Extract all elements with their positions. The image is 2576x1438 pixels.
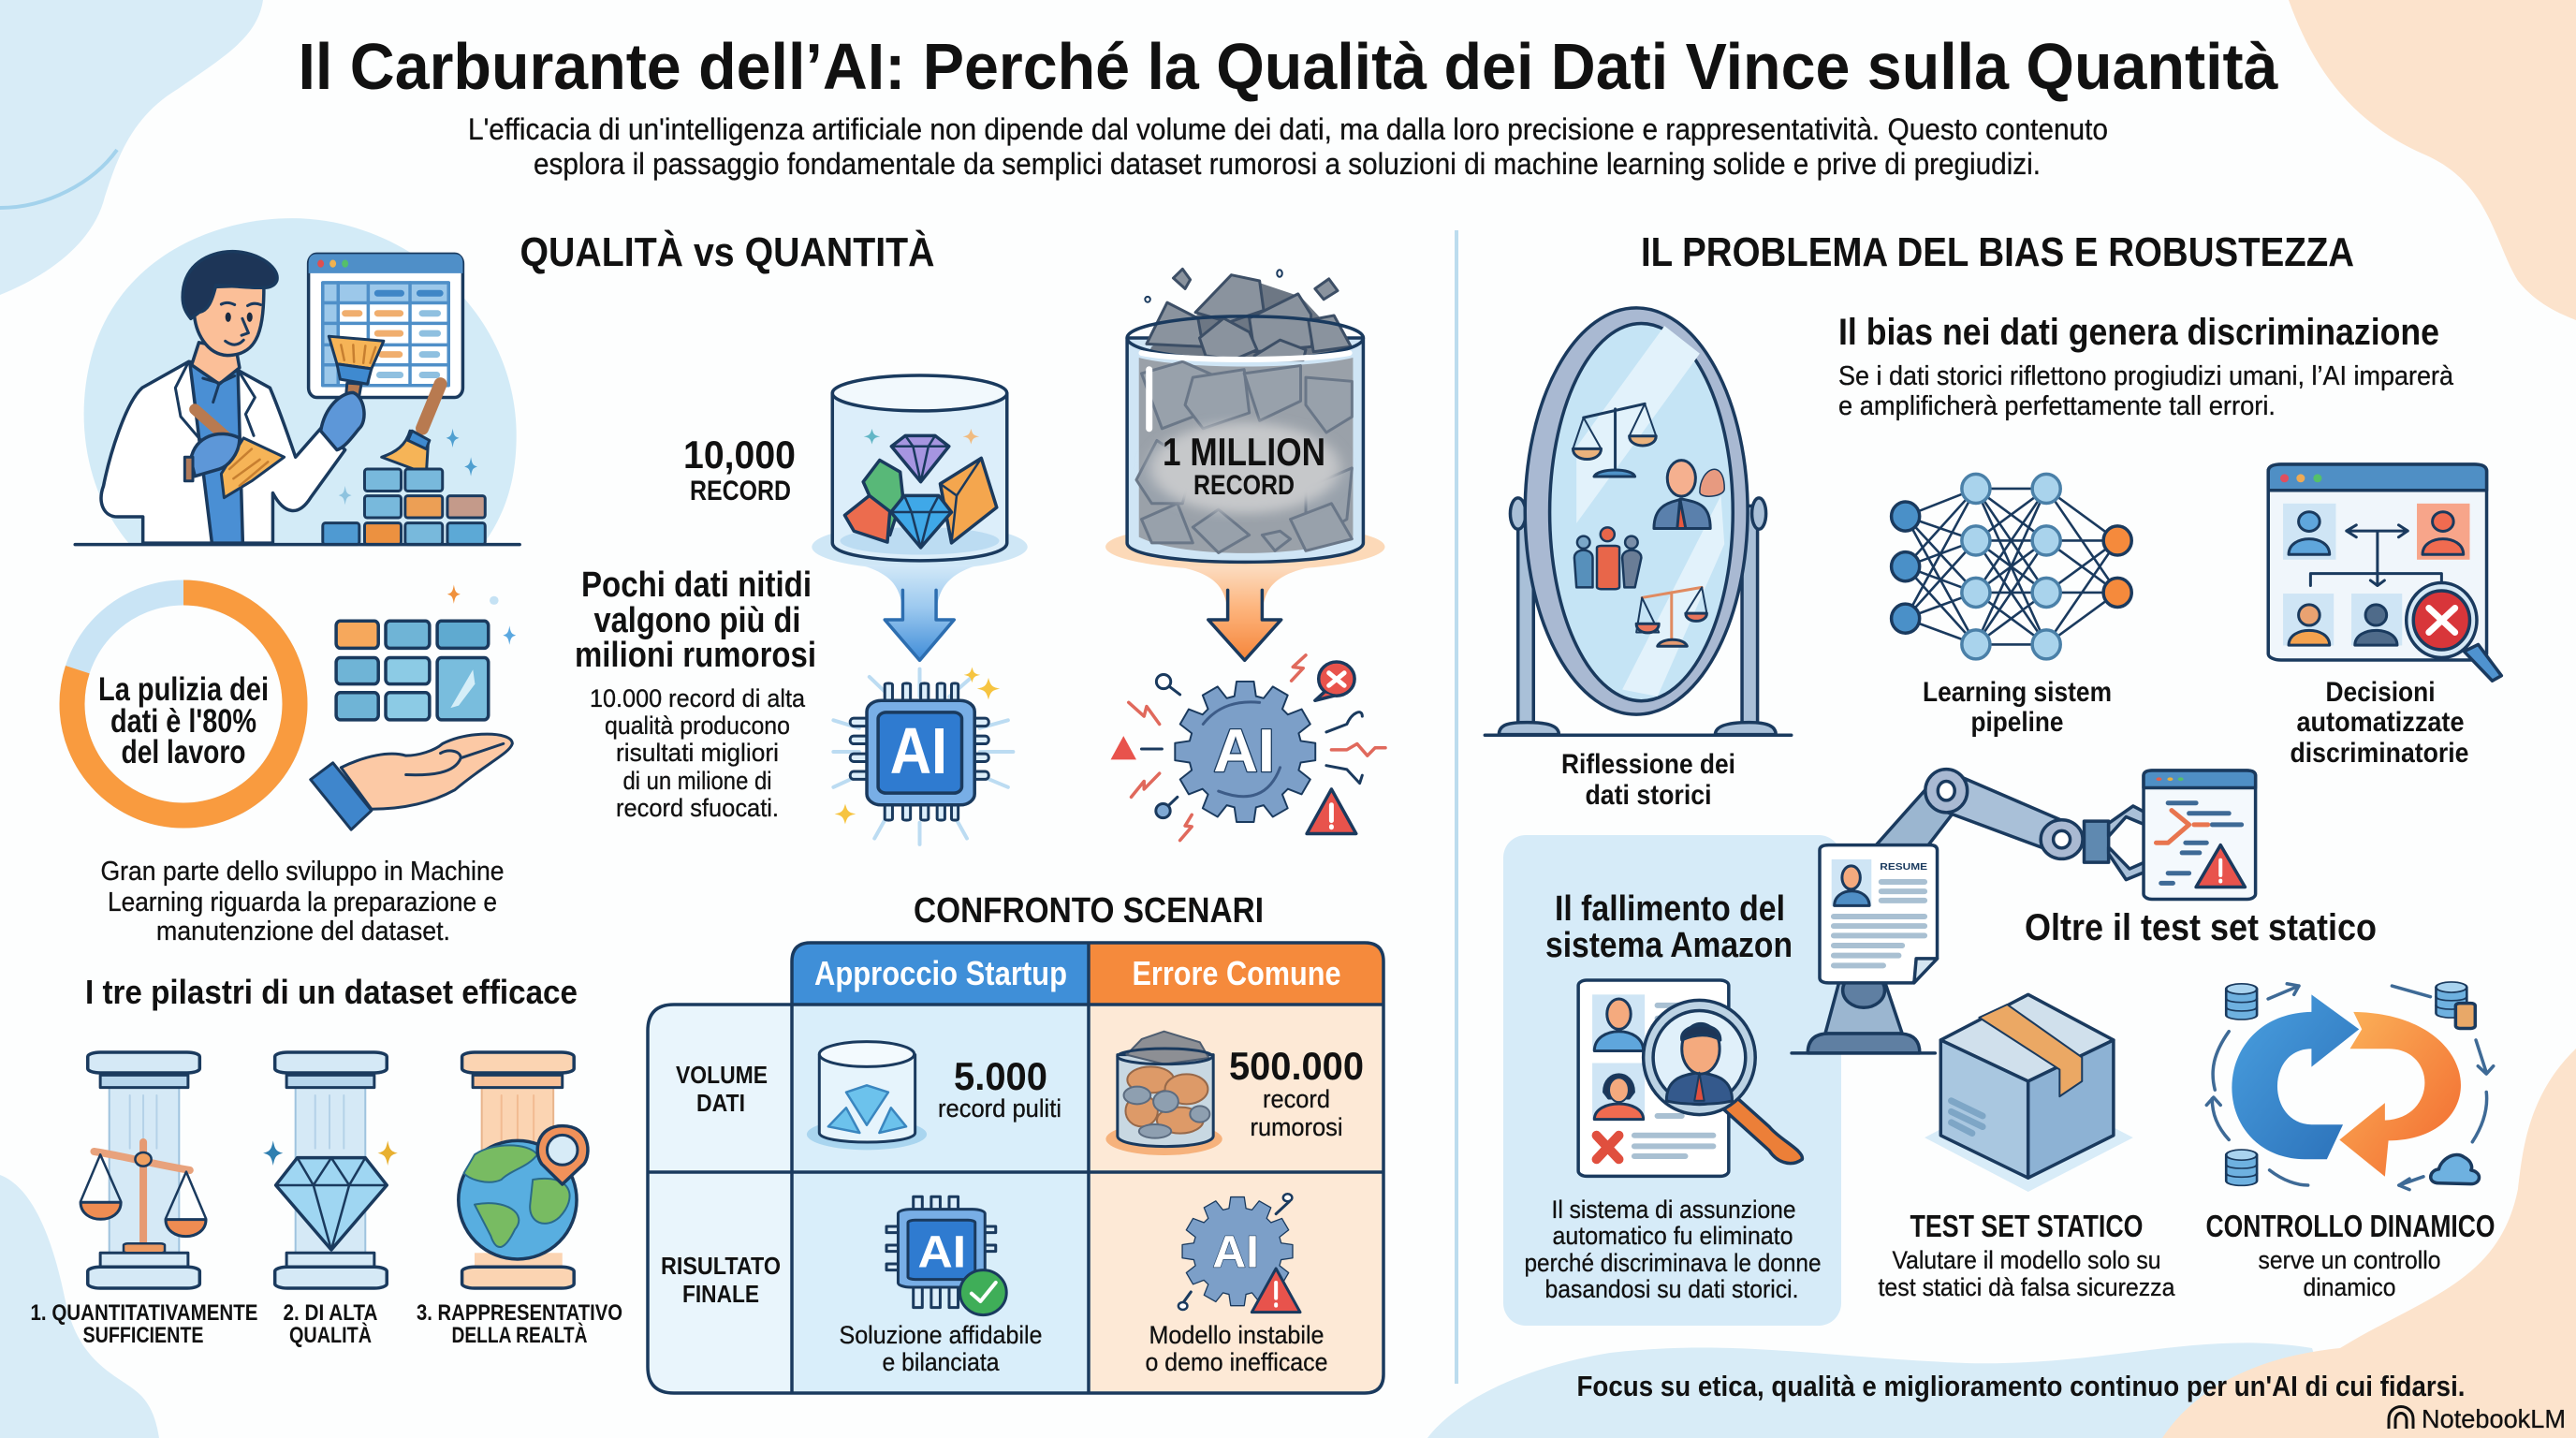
cell: 5.000 clean records: record puliti [938, 1094, 1061, 1123]
donut label [98, 671, 269, 770]
background blob: bottom band blue [1427, 1343, 2340, 1438]
text: static test set [1878, 1209, 2175, 1301]
text: static test set: TEST SET STATICO [1910, 1209, 2144, 1243]
label: automated decisions: Decisioni [2325, 677, 2436, 708]
heading: few clean data: valgono più di [593, 601, 801, 640]
text: amazon body: perché discriminava le donne [1524, 1249, 1822, 1277]
label: neural network: pipeline [1971, 707, 2063, 738]
text: few clean data body: di un milione di [623, 767, 771, 795]
table header: common error [1089, 943, 1383, 1005]
icon: small brush [382, 384, 441, 474]
pillar labels: QUALITÀ [289, 1322, 372, 1348]
icon: data grid held by hand [311, 584, 516, 829]
cell: 500.000 noisy records [1229, 1044, 1364, 1141]
background blob: top right orange [2289, 0, 2576, 320]
label: 10,000 record: 10,000 [683, 433, 796, 477]
icon: data bricks [323, 469, 485, 545]
arrow: noisy data [1178, 566, 1313, 660]
table header: startup [792, 943, 1089, 1005]
icon: scale orange [1636, 587, 1706, 646]
icon: static test box [1925, 994, 2133, 1192]
icon: noisy jar [1105, 1032, 1222, 1155]
heading: few clean data [575, 565, 816, 675]
table icons [807, 1032, 1300, 1315]
pillar labels: 3. RAPPRESENTATIVO [417, 1300, 622, 1326]
panel: three pillars [80, 1052, 588, 1288]
icon: clean cylinder [807, 1042, 927, 1150]
text: amazon body [1524, 1196, 1822, 1303]
row label: data volume: VOLUME [676, 1061, 768, 1089]
text: data preparation note: manutenzione del dataset. [156, 917, 450, 946]
icon: AI gear with warning [1178, 1194, 1300, 1313]
pillar labels: DELLA REALTÀ [451, 1322, 588, 1348]
footer message: Focus su etica, qualità e miglioramento continuo per un'AI di cui fidarsi. [1576, 1370, 2466, 1402]
illustration: robot arm with resume [1792, 770, 2256, 1053]
heading: amazon: Il fallimento del [1555, 889, 1785, 929]
chart: neural network [1892, 474, 2131, 659]
subtitle: L'efficacia di un'intelligenza artificiale non dipende dal volume dei dati, ma dalla loro precisione e rappresentatività. Questo contenuto [468, 112, 2108, 146]
heading: three pillars: I tre pilastri di un dataset efficace [85, 973, 578, 1011]
text: data preparation note: Learning riguarda la preparazione e [108, 888, 497, 917]
icon: dynamic loop [2206, 982, 2494, 1190]
row label: final result [661, 1252, 781, 1308]
label: automated decisions [2290, 677, 2469, 769]
background arc: top left [0, 150, 117, 208]
table: scenario comparison [648, 943, 1383, 1393]
icon: AI chip: AI [890, 715, 947, 788]
text: bias body: e amplificherà perfettamente tall errori. [1838, 391, 2276, 421]
text: amazon body: automatico fu eliminato [1552, 1222, 1793, 1250]
donut label: dati è l'80% [110, 703, 256, 740]
icon: code window [2144, 770, 2256, 899]
donut label: La pulizia dei [98, 671, 269, 708]
cell: 500.000 noisy records: 500.000 [1229, 1044, 1364, 1088]
label: mirror [1561, 749, 1735, 811]
text: few clean data body: record sfuocati. [616, 794, 779, 822]
heading: scenario comparison: CONFRONTO SCENARI [914, 891, 1264, 931]
cell: reliable solution [839, 1321, 1043, 1376]
icon: cylinder with rocks [1127, 269, 1363, 562]
icon: AI chip [833, 667, 1013, 844]
icon: resume sheet [1820, 845, 1938, 983]
subtitle: esplora il passaggio fondamentale da semplici dataset rumorosi a soluzioni di machine learning solide e prive di pregiudizi. [534, 147, 2041, 181]
title: Il Carburante dell’AI: Perché la Qualità dei Dati Vince sulla Quantità [298, 30, 2279, 103]
background blob: bottom left blue [0, 1175, 159, 1438]
label: mirror: dati storici [1586, 780, 1711, 811]
label: neural network [1923, 677, 2112, 738]
label: mirror: Riflessione dei [1561, 749, 1735, 780]
cell: reliable solution: Soluzione affidabile [839, 1321, 1043, 1349]
donut label: del lavoro [122, 734, 245, 770]
pillar labels [30, 1300, 622, 1348]
icon: spreadsheet window [309, 254, 462, 397]
table header: common error: Errore Comune [1133, 954, 1340, 992]
heading: qualità vs quantità: QUALITÀ vs QUANTITÀ [520, 228, 934, 275]
icon: AI gear with errors: AI [1213, 716, 1275, 785]
heading: few clean data: milioni rumorosi [575, 636, 816, 675]
text: few clean data body [590, 684, 806, 822]
heading: beyond static test: Oltre il test set statico [2025, 907, 2377, 948]
pillar labels: 2. DI ALTA [283, 1300, 378, 1326]
pillar labels: SUFFICIENTE [82, 1323, 204, 1348]
text: few clean data body: risultati migliori [616, 739, 779, 767]
icon: businessman [1654, 461, 1724, 528]
subtitle [468, 112, 2108, 181]
icon: scientist [101, 252, 384, 543]
text: data preparation note [101, 857, 504, 946]
text: dynamic control [2205, 1209, 2496, 1301]
text: dynamic control: CONTROLLO DINAMICO [2205, 1209, 2496, 1243]
row label: data volume: DATI [696, 1089, 745, 1117]
cell: unstable model [1146, 1321, 1327, 1376]
illustration: scientist cleaning data [75, 218, 520, 545]
cell: unstable model: o demo inefficace [1146, 1348, 1327, 1376]
label: 10,000 record: RECORD [690, 476, 791, 506]
icon: AI gear with warning: AI [1212, 1226, 1259, 1277]
illustration: clean data to AI [812, 269, 1385, 844]
icon: AI gear with errors [1111, 655, 1385, 841]
icon: automated decision window [2268, 464, 2501, 681]
label: 1 million record: 1 MILLION [1163, 430, 1325, 474]
text: static test set: Valutare il modello solo su [1893, 1246, 2160, 1274]
text: data preparation note: Gran parte dello sviluppo in Machine [101, 857, 504, 887]
cell: 5.000 clean records: 5.000 [954, 1054, 1047, 1098]
icon: AI chip with check: AI [918, 1226, 966, 1277]
text: bias body: Se i dati storici riflettono progiudizi umani, l’AI imparerà [1838, 361, 2454, 391]
text: dynamic control: dinamico [2303, 1273, 2396, 1301]
label: 1 million record: RECORD [1193, 470, 1295, 501]
icon: group [1574, 527, 1641, 589]
icon: AI chip with check [886, 1196, 1006, 1315]
row label: final result: RISULTATO [661, 1252, 781, 1280]
illustration: mirror [1485, 308, 1792, 735]
icon: pillar with diamond [263, 1052, 398, 1288]
donut chart: 80% [72, 593, 295, 815]
cell: 500.000 noisy records: rumorosi [1251, 1113, 1342, 1141]
arrow: clean data [859, 565, 980, 660]
text: amazon body: basandosi su dati storici. [1544, 1275, 1799, 1303]
label: automated decisions: automatizzate [2297, 707, 2464, 738]
icon: pillar with scale [80, 1052, 206, 1288]
text: bias body [1838, 361, 2454, 421]
row label: final result: FINALE [682, 1280, 759, 1308]
background blob: top left blue [0, 0, 263, 295]
text: amazon body: Il sistema di assunzione [1552, 1196, 1795, 1224]
pillar labels: 1. QUANTITATIVAMENTE [30, 1300, 258, 1326]
heading: amazon [1545, 889, 1793, 965]
icon: resume sheet: RESUME [1880, 861, 1927, 872]
heading: amazon: sistema Amazon [1545, 926, 1793, 965]
table header: startup: Approccio Startup [814, 954, 1067, 992]
label: automated decisions: discriminatorie [2290, 738, 2469, 769]
background blob: bottom right orange [2162, 1049, 2576, 1438]
cell: reliable solution: e bilanciata [882, 1348, 1000, 1376]
heading: few clean data: Pochi dati nitidi [581, 565, 812, 605]
label: neural network: Learning sistem [1923, 677, 2112, 708]
cell: unstable model: Modello instabile [1149, 1321, 1324, 1349]
label: 1 million record [1163, 430, 1325, 501]
cell: 500.000 noisy records: record [1263, 1085, 1330, 1113]
text: few clean data body: qualità producono [605, 712, 790, 740]
row label: data volume [676, 1061, 768, 1117]
cell: 5.000 clean records [938, 1054, 1061, 1123]
text: dynamic control: serve un controllo [2258, 1246, 2441, 1274]
icon: pillar with globe [459, 1052, 588, 1288]
heading: bias e robustezza: IL PROBLEMA DEL BIAS E ROBUSTEZZA [1641, 229, 2354, 275]
icon: scale blue [1573, 404, 1656, 477]
panel: amazon failure [1503, 835, 1841, 1326]
text: static test set: test statici dà falsa sicurezza [1878, 1273, 2175, 1301]
icon: magnified resume [1578, 980, 1802, 1176]
text: few clean data body: 10.000 record di alta [590, 684, 806, 712]
NotebookLM logo: NotebookLM [2422, 1404, 2566, 1433]
heading: bias: Il bias nei dati genera discriminazione [1838, 312, 2439, 353]
label: 10,000 record [683, 433, 796, 506]
icon: cylinder with gems [832, 375, 1007, 561]
